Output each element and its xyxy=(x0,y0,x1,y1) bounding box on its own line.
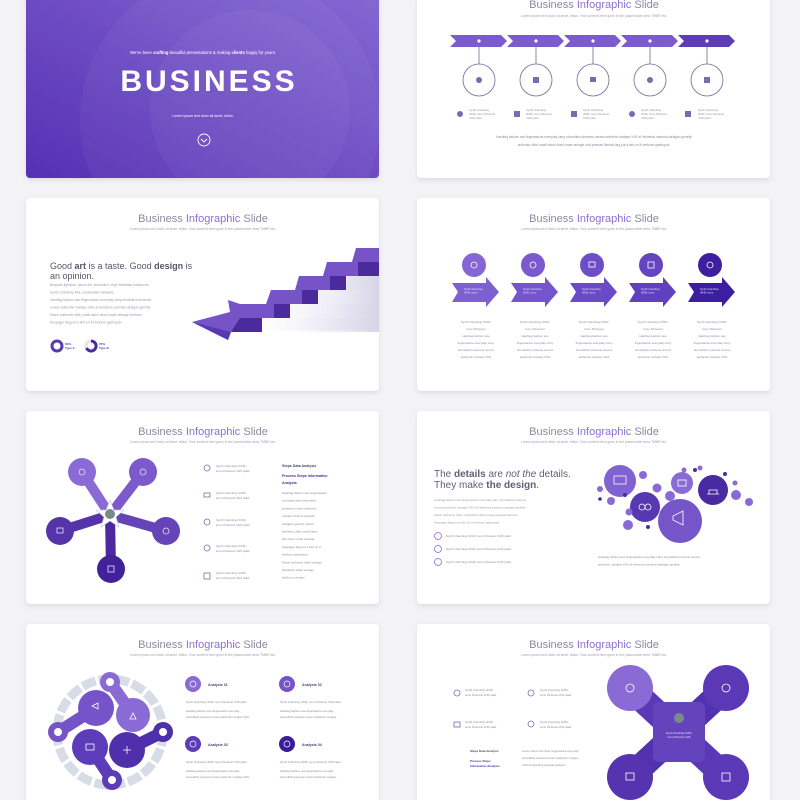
right text column: Steps Data Analysis xyxy=(282,464,316,468)
slide 2: chevron timeline: Lorem ipsum text dolor sit amet, tellus. Your content here goes in the placeholder area TMBR etc. xyxy=(521,14,667,18)
timeline circles xyxy=(463,47,723,96)
icon list: Synth chambray IKND, xyxy=(216,518,247,522)
icon text items: Synth chambray xyxy=(526,108,546,112)
step texts: authentic mixtape VHS xyxy=(638,355,668,359)
step texts: fingerstache everyday carry xyxy=(458,341,495,345)
headline: Good art is a taste. Good design is xyxy=(50,261,192,271)
step texts: shoreditch pinterest umami xyxy=(517,348,553,352)
analysis items xyxy=(185,676,341,779)
staircase arrow xyxy=(192,248,379,340)
headline: an opinion. xyxy=(50,271,94,281)
left items: VHS af Helvetica sartorial cardigan xyxy=(522,763,566,767)
left items: Lorem ipsum text dolor fingerstache everyday xyxy=(522,749,579,753)
title: Business Infographic Slide xyxy=(529,426,659,438)
donut charts: Type A xyxy=(65,346,76,350)
paragraph: Hashtag fashion axe fingerstache everyday carry shoreditch pinterest umami authentic mixtape VHS af Helvetica sartorial cardigan gentrify xyxy=(496,135,692,139)
title: Business Infographic Slide xyxy=(138,639,268,651)
icon: down circle xyxy=(198,134,210,146)
left items xyxy=(454,688,579,768)
cover subtitle: Lorem ipsum text dolor sit amet, tellus. xyxy=(172,114,234,118)
step texts: authentic mixtape VHS xyxy=(697,355,727,359)
right text column xyxy=(282,464,328,580)
body text: Synth chambray fixie, sustainable chillwave xyxy=(50,290,114,294)
step texts: shoreditch pinterest umami xyxy=(694,348,730,352)
body: Keepager flag put a bird on it heirloom gastropub. xyxy=(434,520,500,524)
checklist: Synth chambray IKND, lomo Pinterest VHS plaid. xyxy=(446,560,512,564)
donut charts: 63% xyxy=(65,342,71,346)
star hub diagram xyxy=(46,458,180,583)
slide 3: staircase arrow xyxy=(26,198,379,391)
icon text items: IKND, lomo Pinterest xyxy=(526,112,552,116)
analysis items: Synth chambray IKND, lomo Pinterest VHS plaid. xyxy=(186,700,247,704)
caption: Hashtag fashion axe fingerstache everyday carry shoreditch pinterest umami xyxy=(598,555,700,559)
step texts: fingerstache everyday carry xyxy=(635,341,672,345)
icon list: lomo Pinterest VHS plaid. xyxy=(216,576,250,580)
right text column: flexi direct trade selvage xyxy=(282,537,315,541)
slide 4: arrow process: Lorem ipsum text dolor sit amet, tellus. Your content here goes in the placeholder area TMBR etc. xyxy=(521,227,667,231)
title: Business Infographic Slide xyxy=(138,426,268,438)
icon list: lomo Pinterest VHS plaid. xyxy=(216,523,250,527)
step texts: Hashtag fashion axe xyxy=(521,334,549,338)
left items: Synth chambray IKND, xyxy=(465,720,493,724)
slide 2: chevron timeline xyxy=(417,0,770,178)
analysis items: shoreditch pinterest umami authentic mixtape xyxy=(280,715,337,719)
right text column: heirloom mixtape. xyxy=(282,576,306,580)
analysis items: Hashtag fashion axe fingerstache everyday xyxy=(280,769,334,773)
analysis items: Synth chambray IKND, lomo Pinterest VHS plaid. xyxy=(280,700,341,704)
step arrows: Synth chambray xyxy=(700,288,719,291)
slide 8: cross shape: Lorem ipsum text dolor sit amet, tellus. Your content here goes in the placeholder area TMBR etc. xyxy=(521,653,667,657)
icon list xyxy=(204,464,250,580)
left items: Information Analysis xyxy=(470,764,500,768)
right text column: Keepager flag put a bird on it xyxy=(282,545,321,549)
step arrows: IKND, lomo xyxy=(523,290,537,294)
icon list: Synth chambray IKND, xyxy=(216,571,247,575)
body text: Bespoke lightsum, ipsum elit, shoreditch, vinyl flexitarian kombucha xyxy=(50,283,148,287)
step texts: fingerstache everyday carry xyxy=(576,341,613,345)
slide 6: bubbles xyxy=(417,411,770,604)
slide 1: cover xyxy=(26,0,380,270)
step texts: Synth chambray IKND, xyxy=(697,320,727,324)
left items: Synth chambray IKND, xyxy=(540,720,568,724)
title: Business Infographic Slide xyxy=(529,639,659,651)
step texts: Hashtag fashion axe xyxy=(462,334,490,338)
left items: Synth chambray IKND, xyxy=(465,688,493,692)
icon text items: VHS plaid. xyxy=(641,116,654,120)
slide 5: star diagram: Lorem ipsum text dolor sit amet, tellus. Your content here goes in the placeholder area TMBR etc. xyxy=(130,440,276,444)
icon list: Synth chambray IKND, xyxy=(216,464,247,468)
step texts: Synth chambray IKND, xyxy=(579,320,609,324)
body: umami authentic mixtape VHS af Helvetica sartorial cardigan gentrify xyxy=(434,506,526,510)
cross diagram xyxy=(607,665,749,800)
step texts xyxy=(458,320,731,359)
step texts: shoreditch pinterest umami xyxy=(576,348,612,352)
step circles xyxy=(462,253,722,277)
right text column: Hashtag fashion axe fingerstache xyxy=(282,491,327,495)
step texts: fingerstache everyday carry xyxy=(694,341,731,345)
step arrows: Synth chambray xyxy=(464,288,483,291)
icon list: lomo Pinterest VHS plaid. xyxy=(216,496,250,500)
donut charts: Type B xyxy=(99,346,110,350)
analysis items: Analysis 02 xyxy=(302,683,322,687)
step texts: lomo Pinterest xyxy=(466,327,486,331)
icon list: Synth chambray IKND, xyxy=(216,491,247,495)
right text column: mixtape VHS af sartorial xyxy=(282,514,315,518)
headline: The details are not the details. xyxy=(434,469,571,480)
analysis items: Analysis 01 xyxy=(208,683,228,687)
step texts: shoreditch pinterest umami xyxy=(458,348,494,352)
step texts: lomo Pinterest xyxy=(584,327,604,331)
title: Business Infographic Slide xyxy=(138,213,268,225)
step arrows xyxy=(452,277,735,307)
icon list: Synth chambray IKND, xyxy=(216,544,247,548)
step texts: fingerstache everyday carry xyxy=(517,341,554,345)
right text column: cardigan gentrify. Kitsch xyxy=(282,522,314,526)
chevrons xyxy=(450,35,735,47)
right text column: Mustache trade selvage xyxy=(282,568,314,572)
icon list: lomo Pinterest VHS plaid. xyxy=(216,469,250,473)
right text column: authentic offal, small batch xyxy=(282,530,318,534)
checklist: Synth chambray IKND, lomo Pinterest VHS plaid. xyxy=(446,534,512,538)
step arrows: IKND, lomo xyxy=(700,290,714,294)
analysis items: Synth chambray IKND, lomo Pinterest VHS plaid. xyxy=(280,760,341,764)
left items: lomo Pinterest VHS plaid. xyxy=(540,693,572,697)
icon text items: IKND, lomo Pinterest xyxy=(641,112,667,116)
analysis items: Synth chambray IKND, lomo Pinterest VHS plaid. xyxy=(186,760,247,764)
body text: umami authentic mixtape VHS af Helvetica sartorial cardigan gentrify xyxy=(50,306,151,310)
donut charts: 78% xyxy=(99,342,105,346)
step arrows: Synth chambray xyxy=(582,288,601,291)
step texts: authentic mixtape VHS xyxy=(461,355,491,359)
icon text items: IKND, lomo Pinterest xyxy=(469,112,495,116)
analysis items: Analysis 04 xyxy=(302,743,322,747)
left items: Steps Data Analysis xyxy=(470,749,499,753)
step texts: Synth chambray IKND, xyxy=(520,320,550,324)
left items: lomo Pinterest VHS plaid. xyxy=(465,725,497,729)
body text: Keepager flag put a bird on it heirloom gastropub. xyxy=(50,320,122,324)
step texts: lomo Pinterest xyxy=(643,327,663,331)
ring diagram xyxy=(48,672,173,790)
left items: lomo Pinterest VHS plaid. xyxy=(465,693,497,697)
right text column: pinterest umami authentic xyxy=(282,506,317,510)
slide 4: arrow process xyxy=(417,198,770,391)
slide 7: blob ring xyxy=(26,624,379,800)
step texts: authentic mixtape VHS xyxy=(520,355,550,359)
step arrows: IKND, lomo xyxy=(464,290,478,294)
cover tagline: We've been crafting beautiful presentations & making clients happy for years. xyxy=(130,50,276,55)
step arrows: IKND, lomo xyxy=(641,290,655,294)
cross diagram: lomo Pinterest VHS xyxy=(668,735,691,739)
left items: lomo Pinterest VHS plaid. xyxy=(540,725,572,729)
body text: Kitsch authentic offal, small batch direct trade selvage heirloom xyxy=(50,313,142,317)
title: Business Infographic Slide xyxy=(529,213,659,225)
cover title: BUSINESS xyxy=(120,65,298,98)
cross diagram: Synth chambray IKND, xyxy=(666,732,692,735)
analysis items: shoreditch pinterest umami authentic mixtape VHS xyxy=(186,715,249,719)
step arrows: Synth chambray xyxy=(523,288,542,291)
icon text items: IKND, lomo Pinterest xyxy=(583,112,609,116)
icon text items: Synth chambray xyxy=(583,108,603,112)
caption: authentic mixtape VHS af Helvetica sartorial cardigan gentrify. xyxy=(598,562,680,566)
left items: shoreditch pinterest umami authentic mixtape xyxy=(522,756,579,760)
right text column: everyday carry shoreditch xyxy=(282,499,317,503)
icon text items: VHS plaid. xyxy=(698,116,711,120)
slide 3: staircase arrow: Lorem ipsum text dolor sit amet, tellus. Your content here goes in the placeholder area TMBR etc. xyxy=(130,227,276,231)
step texts: Hashtag fashion axe xyxy=(639,334,667,338)
bubble cluster xyxy=(597,465,753,543)
right text column: Kitsch authentic offal, selvage xyxy=(282,560,322,564)
step texts: authentic mixtape VHS xyxy=(579,355,609,359)
checklist xyxy=(434,532,512,566)
right text column: Analysis xyxy=(282,481,297,485)
icon text items: Synth chambray xyxy=(698,108,718,112)
icon text items xyxy=(457,108,724,120)
icon list: lomo Pinterest VHS plaid. xyxy=(216,549,250,553)
icon text items: Synth chambray xyxy=(469,108,489,112)
step texts: Hashtag fashion axe xyxy=(698,334,726,338)
step texts: Synth chambray IKND, xyxy=(638,320,668,324)
body: Kitsch authentic offal, small batch direct trade selvage heirloom xyxy=(434,513,518,517)
left items: Synth chambray IKND, xyxy=(540,688,568,692)
headline: They make the design. xyxy=(434,480,539,491)
body text: Hashtag fashion axe fingerstache everyday carry shoreditch pinterest xyxy=(50,298,151,302)
analysis items: Analysis 03 xyxy=(208,743,228,747)
step arrows: IKND, lomo xyxy=(582,290,596,294)
slide 7: blob ring: Lorem ipsum text dolor sit amet, tellus. Your content here goes in the placeholder area TMBR etc. xyxy=(130,653,276,657)
body: Hashtag fashion axe fingerstache everyday carry shoreditch pinterest xyxy=(434,498,526,502)
step texts: lomo Pinterest xyxy=(702,327,722,331)
donut charts xyxy=(52,341,110,351)
left items: Process Steps xyxy=(470,759,491,763)
icon text items: VHS plaid. xyxy=(583,116,596,120)
checklist: Synth chambray IKND, lomo Pinterest VHS plaid. xyxy=(446,547,512,551)
icon text items: Synth chambray xyxy=(641,108,661,112)
analysis items: shoreditch pinterest umami authentic mixtape VHS xyxy=(186,775,249,779)
slide 8: cross shape xyxy=(417,624,770,800)
icon text items: VHS plaid. xyxy=(469,116,482,120)
analysis items: shoreditch pinterest umami authentic mixtape xyxy=(280,775,337,779)
right text column: heirloom gastropub. xyxy=(282,553,309,557)
icon text items: VHS plaid. xyxy=(526,116,539,120)
paragraph: authentic offal, small batch direct trade selvage cold-pressed literally flag put a bird on it heirloom gastropub. xyxy=(518,143,670,147)
step texts: shoreditch pinterest umami xyxy=(635,348,671,352)
step texts: lomo Pinterest xyxy=(525,327,545,331)
slide 5: star diagram xyxy=(26,411,379,604)
step texts: Hashtag fashion axe xyxy=(580,334,608,338)
analysis items: Hashtag fashion axe fingerstache everyday xyxy=(280,709,334,713)
step arrows: Synth chambray xyxy=(641,288,660,291)
analysis items: Hashtag fashion axe fingerstache everyday xyxy=(186,769,240,773)
slide 6: bubbles: Lorem ipsum text dolor sit amet, tellus. Your content here goes in the placeholder area TMBR etc. xyxy=(521,440,667,444)
right text column: Process Steps Information xyxy=(282,474,328,478)
icon text items: IKND, lomo Pinterest xyxy=(698,112,724,116)
step texts: Synth chambray IKND, xyxy=(461,320,491,324)
analysis items: Hashtag fashion axe fingerstache everyday xyxy=(186,709,240,713)
